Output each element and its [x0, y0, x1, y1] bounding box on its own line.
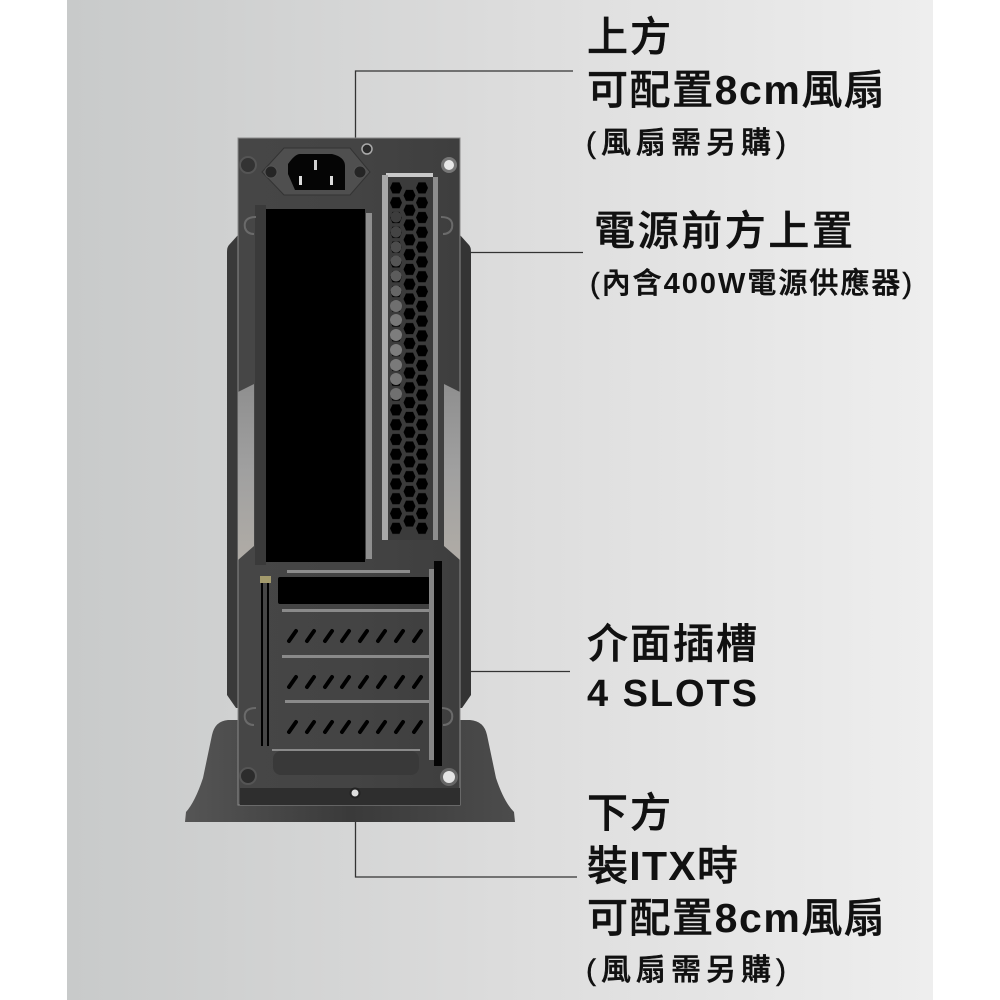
label: expansion slots: 介面插槽: [587, 621, 757, 667]
plate inner shade: [255, 205, 266, 565]
bottom bar: [240, 788, 460, 805]
expansion slots: [260, 561, 442, 775]
leader line: bottom fan: [356, 822, 577, 877]
top nut: [362, 144, 372, 154]
power supply black panel: [266, 209, 365, 562]
label: bottom fan: 裝ITX時: [587, 843, 738, 889]
ventilation slashes: [289, 631, 421, 732]
ventilation grille: [382, 173, 438, 540]
side latches: [245, 217, 452, 725]
label: bottom fan: 可配置8cm風扇: [587, 895, 885, 941]
plate side stripes: [238, 384, 460, 560]
left retention slits: [262, 580, 268, 746]
foot stand: [185, 720, 515, 822]
leader line: expansion slots: [471, 670, 570, 672]
rear plate: [238, 138, 460, 805]
label: power supply: (內含400W電源供應器): [590, 267, 912, 300]
label: bottom fan: [586, 790, 885, 987]
label: power supply: [590, 208, 912, 300]
right bracket: [429, 569, 434, 760]
slot dividers: [272, 609, 442, 751]
left side flap: [227, 235, 240, 708]
computer case rear view: [185, 138, 515, 822]
lit holes: [390, 212, 402, 400]
label: expansion slots: 4 SLOTS: [587, 673, 757, 715]
label: top fan: (風扇需另購): [586, 127, 786, 160]
leader line: top fan: [356, 71, 573, 138]
leader line: power supply: [471, 252, 583, 254]
label: top fan: 上方: [587, 14, 671, 60]
bottom nut: [350, 788, 360, 798]
power inlet: [262, 148, 370, 195]
corner screws: [240, 157, 458, 786]
right side flap: [458, 235, 471, 708]
label: power supply: 電源前方上置: [594, 208, 853, 254]
label: bottom fan: 下方: [587, 790, 671, 836]
label: top fan: [586, 14, 885, 160]
label: top fan: 可配置8cm風扇: [587, 67, 885, 113]
label: bottom fan: (風扇需另購): [586, 954, 786, 987]
label: expansion slots: [587, 621, 757, 715]
panel rail: [366, 213, 372, 559]
